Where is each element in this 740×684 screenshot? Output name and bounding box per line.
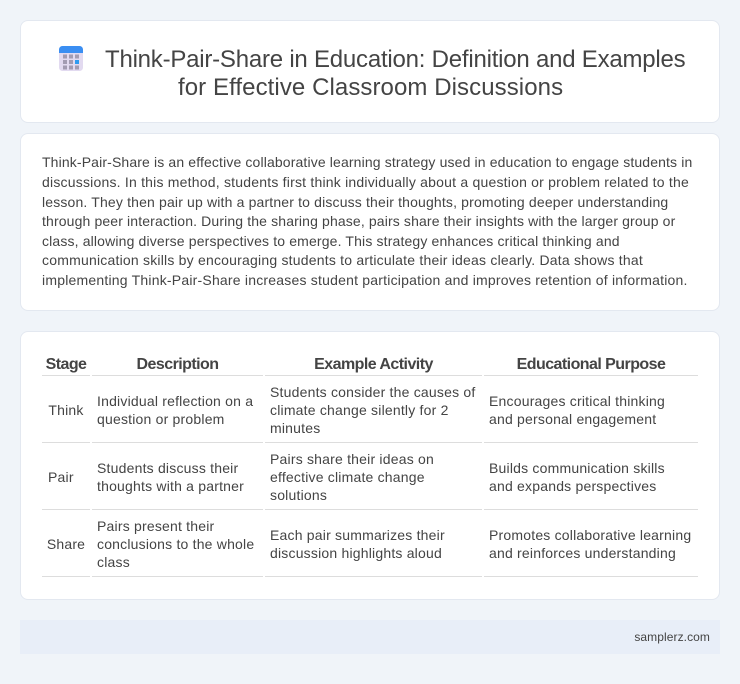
- intro paragraph: class, allowing diverse perspectives to emerge. This strategy enhances critical thinking and: [42, 233, 620, 249]
- row: Share activity: Each pair summarizes their: [270, 527, 445, 543]
- row: Think stage: Think: [48, 402, 84, 418]
- footer text: samplerz.com: [634, 630, 710, 644]
- row: Pair purpose: and expands perspectives: [489, 478, 656, 494]
- row: Pair description: [97, 460, 244, 494]
- row: Share activity: discussion highlights aloud: [270, 545, 442, 561]
- row: Pair stage: Pair: [48, 469, 74, 485]
- row: Share purpose: Promotes collaborative learning: [489, 527, 691, 543]
- title: [105, 46, 685, 101]
- panel: table card: [20, 331, 720, 600]
- row: Think description: question or problem: [97, 411, 225, 427]
- row: Share description: class: [97, 554, 130, 570]
- row: Pair purpose: Builds communication skills: [489, 460, 665, 476]
- panel: intro card: [20, 133, 720, 311]
- table: [42, 356, 698, 577]
- row: Share purpose: and reinforces understanding: [489, 545, 676, 561]
- row: Pair activity: [270, 451, 434, 503]
- row: Think description: Individual reflection on a: [97, 393, 253, 409]
- row: Pair description: thoughts with a partner: [97, 478, 244, 494]
- row: Pair description: Students discuss their: [97, 460, 238, 476]
- row: Think purpose: Encourages critical thinking: [489, 393, 665, 409]
- header: Description: Description: [137, 356, 218, 373]
- row: Think activity: minutes: [270, 420, 320, 436]
- footer bar: [20, 620, 720, 654]
- row: Think activity: Students consider the causes of: [270, 384, 475, 400]
- intro paragraph: discussions. In this method, students first think individually about a question or problem related to the: [42, 174, 689, 190]
- panel: title card: [20, 20, 720, 123]
- row: Think purpose: and personal engagement: [489, 411, 656, 427]
- intro paragraph: implementing Think-Pair-Share increases student participation and improves retention of information.: [42, 272, 688, 288]
- row: Share stage: Share: [47, 536, 85, 552]
- header: Stage: Stage: [46, 356, 86, 373]
- intro paragraph: lesson. They then pair up with a partner to discuss their thoughts, promoting deeper understanding: [42, 194, 668, 210]
- row: Share activity: [270, 527, 445, 561]
- intro paragraph: through peer interaction. During the sharing phase, pairs share their insights with the larger group or: [42, 213, 675, 229]
- row: Pair activity: solutions: [270, 487, 327, 503]
- row: Pair activity: effective climate change: [270, 469, 425, 485]
- row: Share description: conclusions to the whole: [97, 536, 254, 552]
- row: Pair purpose: [489, 460, 665, 494]
- icon: calendar: [59, 46, 83, 71]
- intro paragraph: Think-Pair-Share is an effective collaborative learning strategy used in education to engage students in: [42, 154, 692, 170]
- row: Think description: [97, 393, 254, 427]
- row: Share purpose: [489, 527, 691, 561]
- row: Share description: [97, 518, 254, 570]
- row: Think activity: [270, 384, 476, 436]
- row: Pair activity: Pairs share their ideas on: [270, 451, 434, 467]
- intro paragraph: [42, 154, 692, 288]
- row: Think activity: climate change silently for 2: [270, 402, 449, 418]
- title: Think-Pair-Share in Education: Definition and Examples: [105, 46, 685, 73]
- row: Think purpose: [489, 393, 665, 427]
- row: Share description: Pairs present their: [97, 518, 214, 534]
- header: Educational Purpose: Educational Purpose: [517, 356, 665, 373]
- intro paragraph: communication skills by encouraging students to articulate their ideas clearly. Data shows that: [42, 252, 643, 268]
- title: for Effective Classroom Discussions: [178, 74, 563, 101]
- header: Example Activity: Example Activity: [314, 356, 433, 373]
